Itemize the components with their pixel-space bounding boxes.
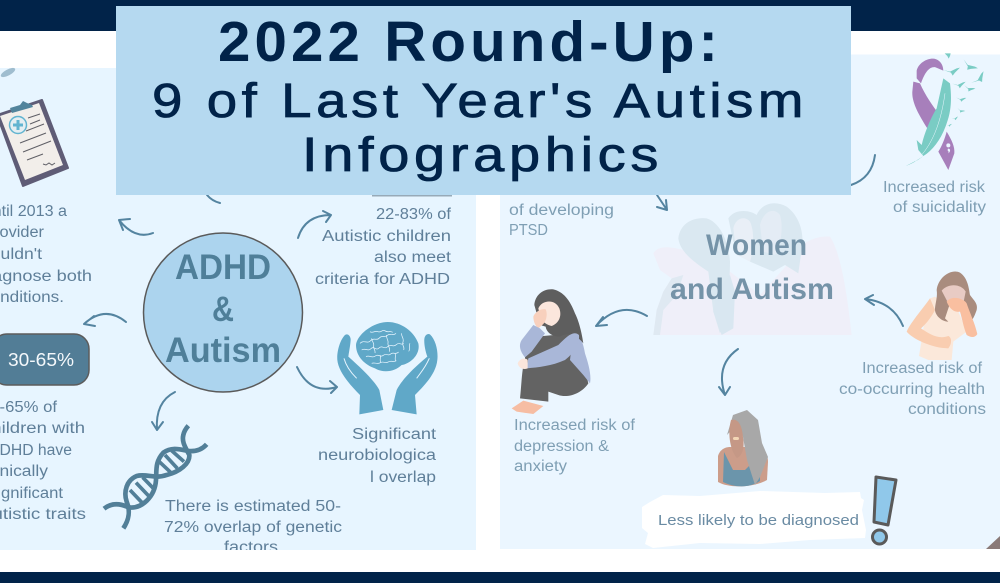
top navy band — [0, 0, 1000, 31]
icon: corner image fragment — [986, 536, 1000, 549]
central circle: & — [212, 290, 234, 329]
arrow: to depression — [596, 310, 647, 326]
text: suicidality: of suicidality — [893, 199, 986, 216]
icon: card edge under title — [372, 195, 452, 196]
icon: DNA helix — [104, 426, 207, 528]
icon: exclamation mark — [872, 477, 896, 544]
arrow: to clipboard — [119, 219, 153, 235]
text: 22-83%: also meet — [374, 249, 452, 266]
text: genetic overlap: factors — [224, 539, 278, 556]
text: genetic overlap: There is estimated 50- — [165, 498, 341, 515]
icon: smudge — [0, 66, 16, 79]
arrow: to brain — [297, 367, 337, 393]
text: depression: depression & — [514, 438, 610, 455]
title line 3: Infographics — [302, 129, 663, 182]
text: neurobiological overlap — [318, 426, 437, 486]
title line 2: 9 of Last Year's Autism — [152, 75, 808, 128]
arrow: from suicidality — [851, 155, 875, 185]
text: depression: Increased risk of — [514, 417, 636, 434]
text: genetic overlap: 72% overlap of genetic — [164, 519, 342, 536]
text: neurobiological overlap: neurobiologica — [318, 447, 436, 464]
panel: Women and Autism — [500, 53, 1000, 549]
icon: clipboard — [0, 100, 68, 186]
text: 22-83%: Autistic children — [322, 228, 451, 245]
text: PTSD: of developing — [509, 202, 614, 219]
text: neurobiological overlap: Significant — [352, 426, 437, 443]
text: neurobiological overlap: l overlap — [370, 469, 436, 486]
text: suicidality: Increased risk — [883, 179, 985, 196]
callout: less likely to be diagnosed — [642, 491, 866, 548]
text: 22-83%: criteria for ADHD — [315, 271, 450, 288]
icon: unwell woman — [907, 272, 977, 360]
stat pill: 30-65% — [0, 334, 89, 385]
central circle: ADHD — [175, 248, 271, 287]
arrow: to PTSD — [657, 195, 667, 210]
icon: woman smiling — [718, 410, 768, 486]
heading: Women and Autism: Women — [706, 229, 807, 262]
icon: woman with hijab — [512, 289, 590, 414]
heading: Women and Autism — [670, 229, 834, 306]
text: co-occurring conditions: co-occurring health — [839, 381, 985, 398]
arrow: to 22-83% — [298, 211, 331, 238]
central circle — [144, 233, 302, 392]
text: depression: anxiety — [514, 458, 567, 475]
stat pill: 30-65%: 30-65% — [8, 350, 74, 370]
text: co-occurring conditions: conditions — [908, 401, 986, 418]
text: co-occurring conditions: Increased risk of — [862, 360, 983, 377]
arrow: to DNA — [152, 392, 175, 430]
heading: Women and Autism: and Autism — [670, 273, 834, 306]
text: genetic overlap — [164, 498, 342, 556]
text: until 2013 — [0, 203, 92, 306]
arrow: under title — [207, 195, 220, 203]
icon: hands and brain — [337, 322, 438, 414]
text: co-occurring conditions — [839, 360, 986, 418]
faded background illustration — [653, 203, 852, 335]
text: 22-83%: 22-83% of — [376, 206, 452, 223]
text: PTSD — [509, 202, 614, 239]
callout: less likely to be diagnosed: Less likely to be diagnosed — [658, 512, 859, 529]
icon: ribbon, feather and birds — [906, 53, 988, 170]
title banner — [116, 6, 851, 195]
arrow: to pill — [84, 314, 126, 326]
text: 30-65% of children — [0, 399, 86, 523]
text: PTSD: PTSD — [509, 222, 548, 239]
cover strip below left panel — [0, 550, 476, 572]
arrow: to health — [865, 295, 903, 326]
panel: ADHD and Autism — [0, 66, 476, 556]
bottom navy band — [0, 572, 1000, 583]
title line 1: 2022 Round-Up: — [218, 10, 722, 74]
text: 22-83% — [315, 206, 452, 288]
text: depression — [514, 417, 636, 475]
arrow: to diagnosis — [719, 349, 738, 395]
central circle: Autism — [165, 331, 281, 370]
text: suicidality — [883, 179, 986, 216]
